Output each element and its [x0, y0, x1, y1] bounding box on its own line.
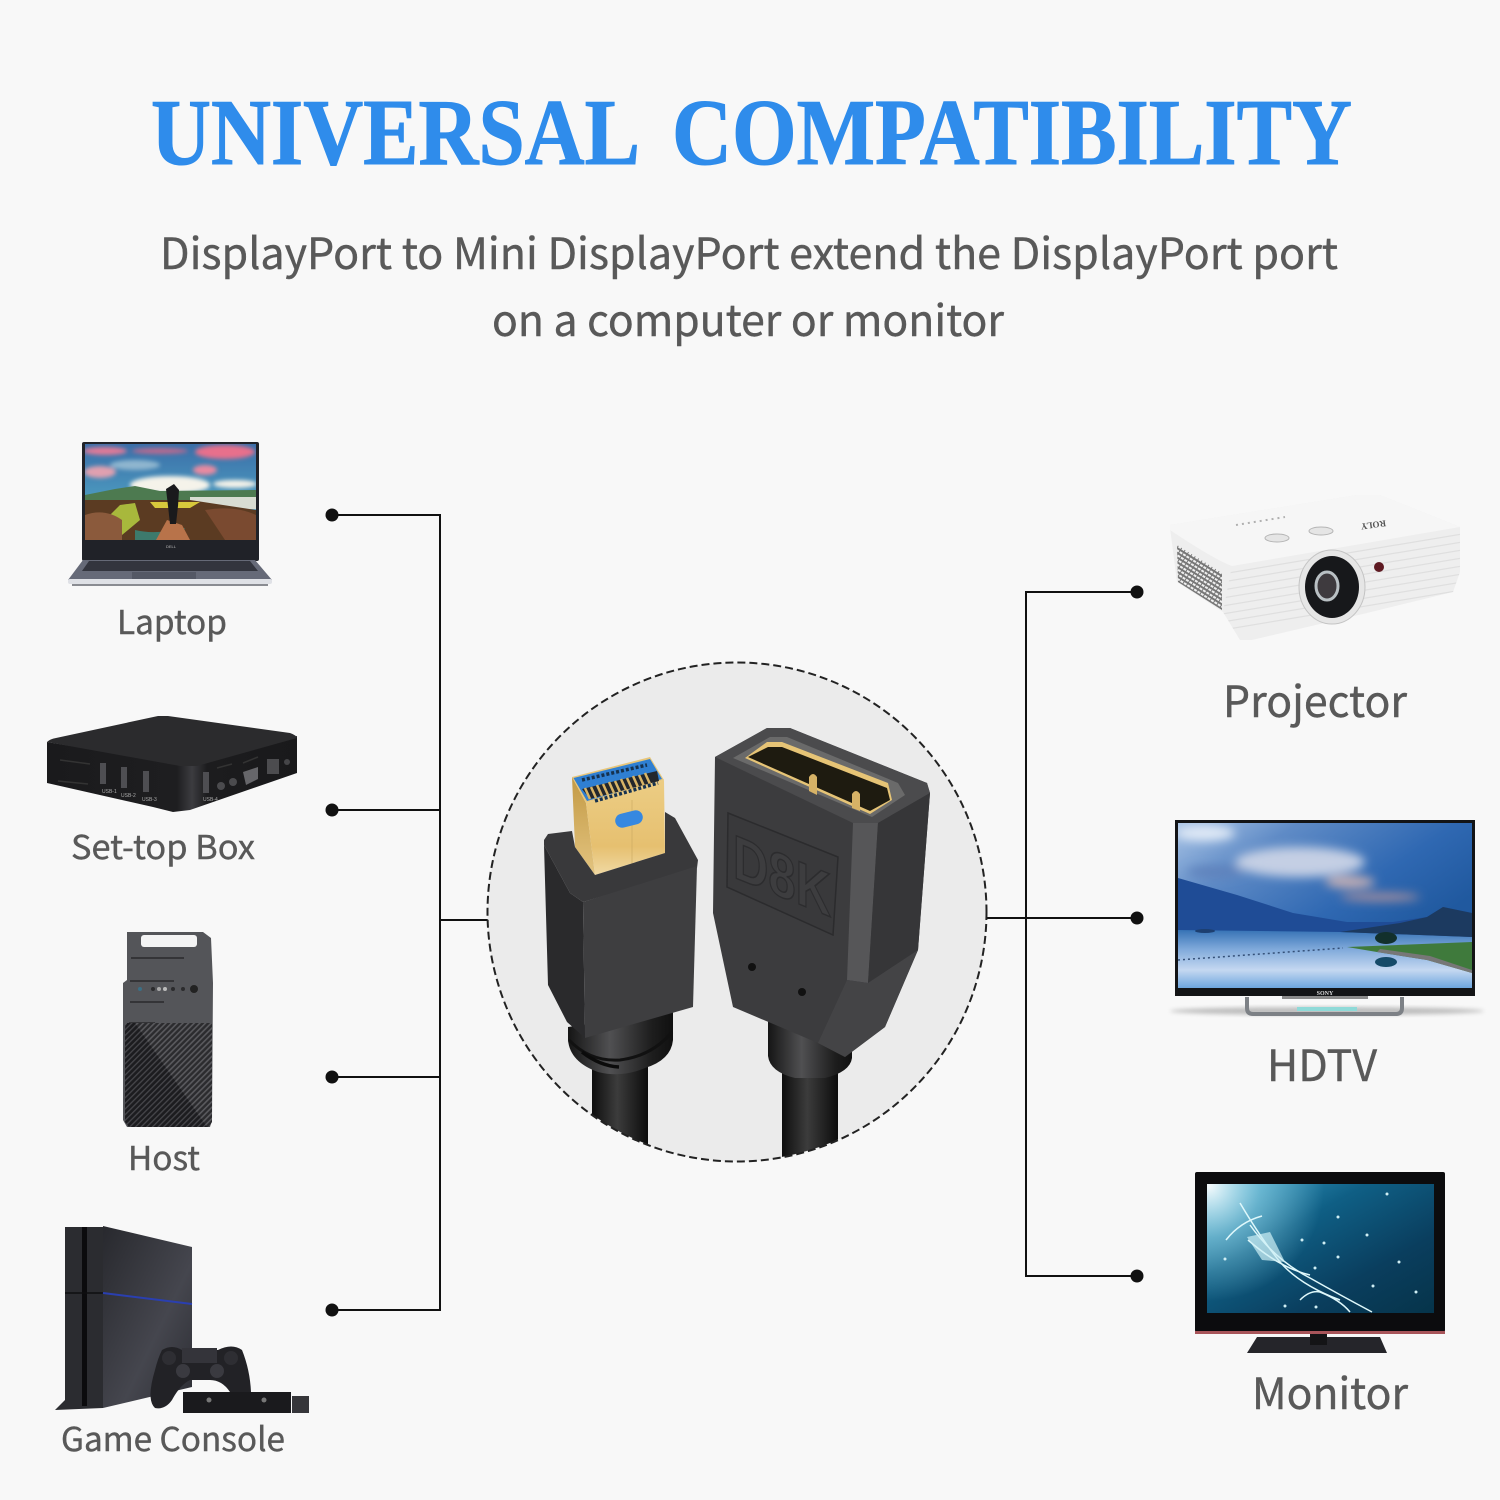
- device: set-top box: USB-4: [203, 797, 218, 803]
- label: Host: Host: [128, 1132, 200, 1180]
- label: Set-top Box: Set-top Box: [71, 821, 255, 869]
- socket side faces: [847, 823, 878, 983]
- device: host tower: [123, 932, 213, 1127]
- subtitle: [160, 220, 1338, 349]
- subtitle: DisplayPort to Mini DisplayPort extend the DisplayPort port: [160, 220, 1338, 282]
- device: projector: ROLY: [1360, 518, 1387, 532]
- label: Monitor: Monitor: [1252, 1360, 1408, 1422]
- device: monitor: [1195, 1172, 1445, 1353]
- device: set-top box: [47, 716, 297, 812]
- device: set-top box: USB-2: [121, 793, 136, 799]
- socket top face: [715, 728, 930, 823]
- camera: [183, 1392, 309, 1413]
- device: set-top box: USB-3: [142, 797, 157, 803]
- device: HDTV: SONY: [1317, 991, 1334, 997]
- dashed circle: [488, 662, 986, 1162]
- mini DisplayPort plug: [544, 757, 698, 1175]
- TV screen photo: [1175, 823, 1472, 988]
- subtitle: on a computer or monitor: [492, 287, 1004, 349]
- laptop base: [68, 560, 272, 580]
- laptop screen photo: [83, 444, 257, 540]
- D8K embossed mark: D8K: [733, 821, 831, 931]
- device: HDTV: [1170, 820, 1484, 1015]
- monitor screen art: [1207, 1184, 1434, 1313]
- device: set-top box: USB-1: [102, 789, 117, 795]
- left connector lines: [326, 508, 488, 1316]
- device: game console: [55, 1226, 309, 1413]
- title: UNIVERSAL: [151, 81, 640, 185]
- right connector lines: [986, 586, 1144, 1282]
- label: Projector: Projector: [1223, 668, 1407, 730]
- label: Laptop: Laptop: [117, 596, 227, 644]
- label: Game Console: Game Console: [61, 1413, 285, 1461]
- title: COMPATIBILITY: [672, 81, 1352, 185]
- DisplayPort socket: [713, 728, 930, 1170]
- device: laptop: [68, 442, 272, 586]
- socket silhouette: [713, 728, 930, 1057]
- title: [151, 81, 1352, 185]
- gold connector tip: [572, 757, 665, 875]
- label: HDTV: HDTV: [1267, 1032, 1377, 1094]
- controller: [150, 1346, 251, 1408]
- central cable illustration: [488, 662, 986, 1175]
- device: projector: [1170, 516, 1460, 640]
- moulded plug boot: [544, 812, 698, 1038]
- device: laptop: DELL: [166, 544, 177, 549]
